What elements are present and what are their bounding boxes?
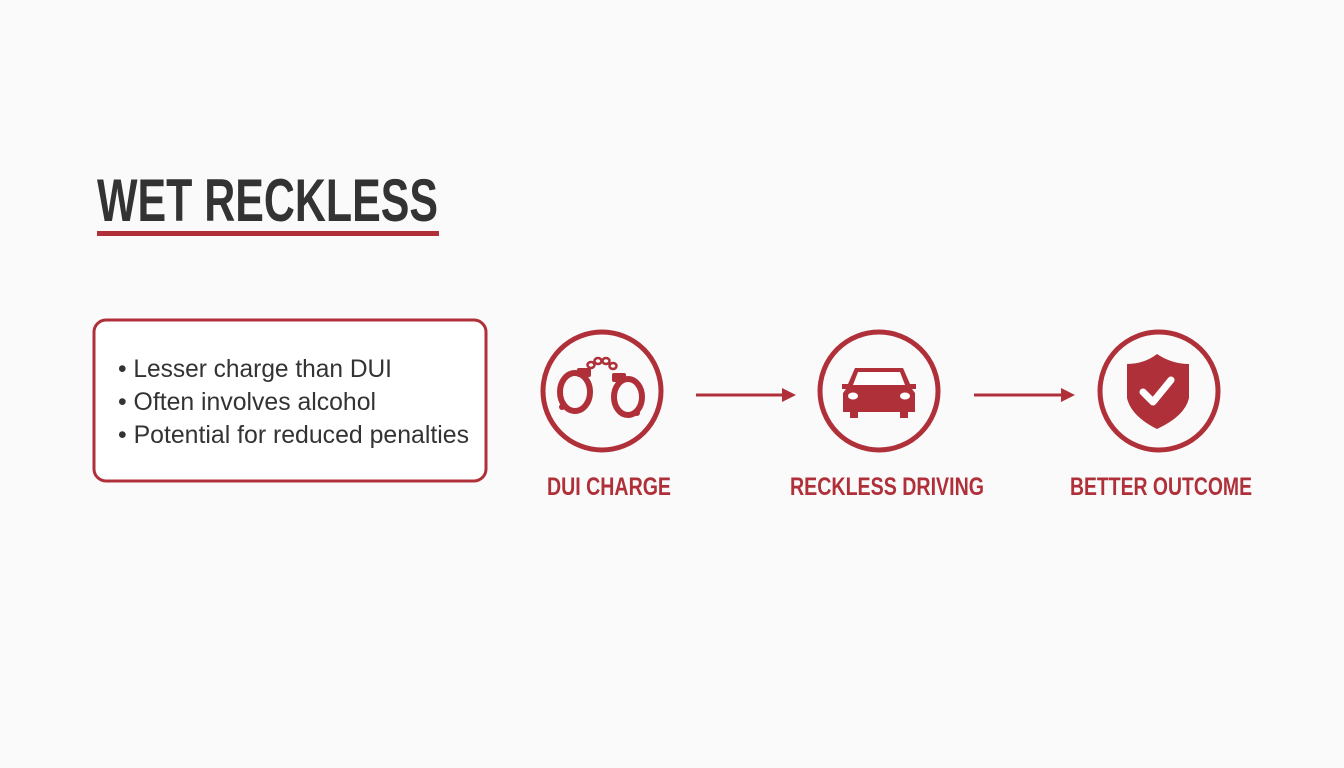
title: WET RECKLESS [97,167,438,234]
arrow 2 [974,388,1075,402]
labels: BETTER OUTCOME [1070,473,1252,501]
labels [547,473,1252,501]
arrow 1 [696,388,796,402]
labels: RECKLESS DRIVING [790,473,984,501]
labels: DUI CHARGE [547,473,671,501]
bullet list: • Lesser charge than DUI [118,355,392,383]
icon: handcuffs [543,332,661,450]
icon: car [820,332,938,450]
bullet list [118,355,469,449]
bullet list: • Potential for reduced penalties [118,421,469,449]
panel: key points [94,320,486,481]
bullet list: • Often involves alcohol [118,388,376,416]
icon: shield check [1100,332,1218,450]
